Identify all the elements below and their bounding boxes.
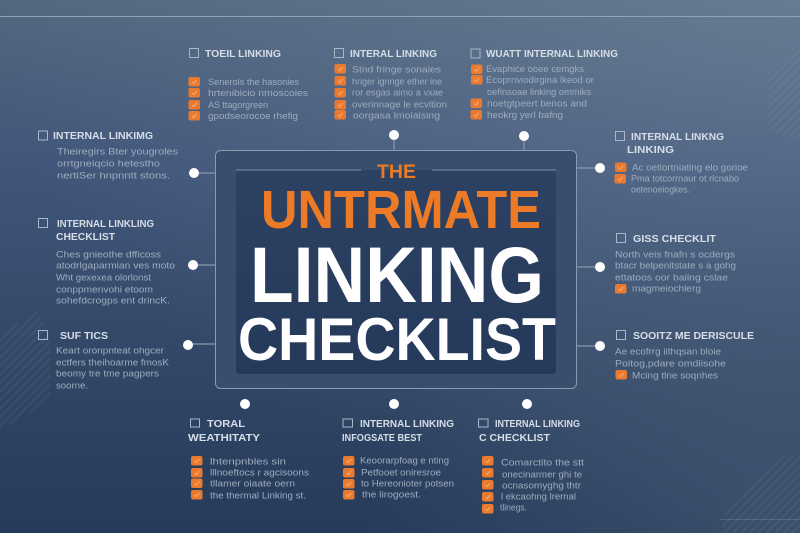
checklist block: right 1: INTERNAL LINKNG bbox=[631, 131, 724, 143]
panel: central title bbox=[216, 150, 576, 388]
checklist block: left 1 bbox=[38, 130, 178, 182]
checklist block: top 2 bbox=[334, 48, 447, 122]
checklist block: bottom 1 bbox=[188, 418, 309, 502]
checklist block: top 1: gpodseorocoe rhefig bbox=[208, 111, 298, 122]
title text: THE bbox=[377, 161, 416, 183]
checklist block: left 2: sohefdcrogps ent drincK. bbox=[56, 296, 170, 306]
checklist block: top 2: hriger ignnge ether ine bbox=[352, 76, 442, 88]
connector lines and dots bbox=[183, 130, 605, 409]
checklist block: bottom 2: Petfooet oniresroe bbox=[361, 468, 441, 478]
checklist block: left 3: soorne. bbox=[56, 380, 88, 392]
checklist block: right 2: GISS CHECKLIT bbox=[633, 233, 717, 245]
checklist block: top 3: Ecoprnviodirgina lkeod or bbox=[486, 75, 594, 86]
checklist block: top 3: heokrg yerl bafng bbox=[487, 110, 563, 121]
checklist block: bottom 2: the lirogoest. bbox=[362, 490, 421, 500]
checklist block: top 1: Senerols the hasonies bbox=[208, 77, 299, 88]
checklist block: bottom 3: Comarctito the stt bbox=[501, 458, 584, 468]
checklist block: left 3: ectfers theihoarme fmosK bbox=[56, 358, 170, 368]
checklist block: left 3: SUF TICS bbox=[60, 330, 108, 342]
checklist block: bottom 3: C CHECKLIST bbox=[479, 432, 551, 444]
checklist block: right 3: Poitog,pdare omdiisohe bbox=[615, 358, 726, 370]
checklist block: top 1 bbox=[188, 48, 308, 122]
checklist block: bottom 2: INFOGSATE BEST bbox=[342, 432, 423, 444]
checklist block: left 2: atodrlgaparmian ves moto bbox=[56, 260, 175, 272]
checklist block: top 2: overinnage le ecvition bbox=[352, 100, 447, 110]
checklist block: right 2 bbox=[615, 233, 736, 294]
checklist block: right 3 bbox=[615, 330, 754, 382]
checklist block: right 3: SOOITZ ME DERISCULE bbox=[633, 330, 754, 342]
checklist block: bottom 3 bbox=[478, 418, 584, 514]
checklist block: left 1: Theiregirs Bter yougroles bbox=[57, 146, 178, 158]
checklist block: top 3 bbox=[470, 48, 618, 121]
checklist block: right 2: North veis fnafn s ocdergs bbox=[615, 250, 735, 260]
checklist block: top 2: INTERAL LINKING bbox=[350, 48, 437, 60]
checklist block: left 2: CHECKLIST bbox=[56, 231, 116, 243]
title text: CHECKLIST bbox=[238, 306, 556, 373]
checklist block: left 1: nertiSer hnpnntt stons. bbox=[57, 170, 170, 182]
checklist block: bottom 3: INTERNAL LINKING bbox=[495, 418, 580, 430]
checklist block: right 2: btacr belpenitstate s a gohg bbox=[615, 260, 736, 272]
checklist block: left 2: Wht gexexea olorlonst bbox=[56, 272, 151, 284]
checklist block: top 2: ror esgas aimo a vxae bbox=[352, 88, 443, 98]
checklist block: bottom 1: WEATHITATY bbox=[188, 432, 260, 444]
checklist block: left 3: Keart oronpnteat ohgcer bbox=[56, 346, 164, 356]
checklist block: right 1: LINKING bbox=[627, 144, 674, 156]
checklist block: top 2: Stnd fringe sonaies bbox=[352, 64, 441, 76]
checklist block: right 3: Mcing tlne soqnhes bbox=[632, 370, 718, 382]
checklist block: right 2: magmeiochlerg bbox=[632, 284, 701, 294]
checklist block: left 1: INTERNAL LINKIMG bbox=[53, 130, 153, 142]
checklist block: left 3 bbox=[38, 330, 170, 392]
checklist block: top 1: TOEIL LINKING bbox=[205, 48, 281, 60]
title text: UNTRMATE bbox=[261, 180, 541, 240]
checklist block: bottom 3: ocnasomyghg thtr bbox=[502, 480, 581, 492]
checklist block: bottom 2: to Hereonioter potsen bbox=[361, 478, 454, 490]
title text: LINKING bbox=[250, 230, 544, 319]
title text bbox=[238, 161, 556, 373]
checklist block: top 1: hrtenibicio nmoscoies bbox=[208, 88, 308, 99]
checklist block: right 1: oetenoeiogkes. bbox=[631, 184, 690, 196]
checklist block: bottom 1: tllamer oiaate oern bbox=[210, 478, 295, 490]
checklist block: top 3: WUATT INTERNAL LINKING bbox=[486, 48, 618, 60]
checklist block: top 3: noetgtpeert benos and bbox=[487, 98, 587, 110]
checklist block: bottom 3: l ekcaohng lrernal bbox=[501, 492, 576, 502]
checklist block: bottom 3: onecinarmer ghi te bbox=[502, 470, 582, 480]
checklist block: bottom 1: TORAL bbox=[207, 418, 246, 430]
checklist block: bottom 1: lllnoeftocs r agcisoons bbox=[210, 468, 309, 478]
checklist block: top 3: Evaphice ooee cemgks bbox=[486, 64, 584, 75]
checklist block: bottom 3: tlinegs. bbox=[500, 502, 527, 514]
checklist block: bottom 2: INTERNAL LINKING bbox=[360, 418, 454, 430]
checklist block: bottom 1: the thermal Linking st. bbox=[210, 490, 306, 502]
checklist block: right 1: Pma totcorrnaur ot rlcnabo bbox=[631, 174, 739, 184]
checklist block: left 2: conppmenvohi etoom bbox=[56, 284, 153, 296]
checklist block: left 2: INTERNAL LINKLING bbox=[57, 218, 154, 230]
checklist block: right 2: ettatoos oor bailng cslae bbox=[615, 272, 728, 284]
checklist block: bottom 1: lhtenpnbles sin bbox=[210, 456, 286, 468]
checklist block: right 1 bbox=[614, 131, 748, 196]
checklist block: top 2: oorgasa lmoiaising bbox=[353, 110, 440, 122]
checklist block: left 3: beomy tre tme pagpers bbox=[56, 368, 159, 380]
checklist block: left 2: Ches gnieothe dfficoss bbox=[56, 250, 161, 260]
checklist block: left 2 bbox=[38, 218, 175, 306]
checklist block: left 1: orrtgneiqcio hetestho bbox=[57, 158, 160, 170]
checklist block: bottom 2: Keoorarpfoag e nting bbox=[360, 456, 449, 466]
checklist block: top 3: oefinsoae linking ommiks bbox=[487, 87, 591, 98]
checklist block: bottom 2 bbox=[342, 418, 454, 500]
checklist block: right 3: Ae ecofrrg iithqsan bloie bbox=[615, 346, 721, 358]
checklist block: right 1: Ac oetiortniating elo gorioe bbox=[632, 162, 748, 174]
checklist block: top 1: AS ttagorgreen bbox=[208, 100, 268, 111]
